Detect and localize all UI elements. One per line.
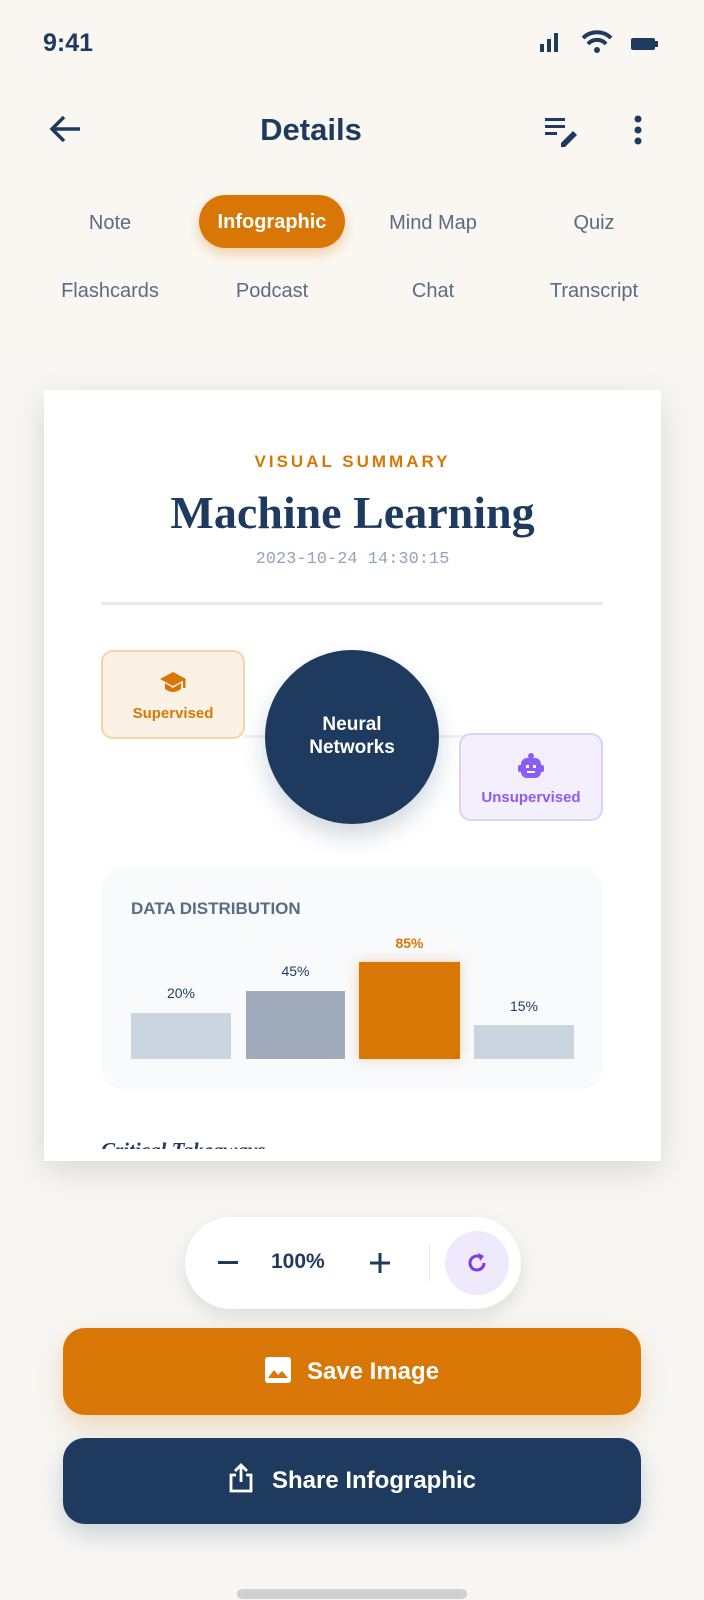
tabs: Flashcards bbox=[61, 280, 159, 302]
connector line bbox=[244, 735, 504, 738]
icon: more bbox=[634, 116, 642, 144]
tabs: Quiz bbox=[573, 212, 615, 234]
tabs: Chat bbox=[412, 280, 454, 302]
icon: graduation cap bbox=[160, 672, 186, 692]
node: supervised bbox=[101, 650, 245, 739]
active tab pill bbox=[199, 195, 345, 248]
date: 2023-10-24 14:30:15 bbox=[256, 550, 449, 569]
bar chart bbox=[131, 935, 574, 1066]
icon: robot bbox=[518, 753, 544, 778]
save button: Save Image bbox=[307, 1358, 439, 1385]
back arrow bbox=[50, 116, 80, 142]
node: supervised: Supervised bbox=[133, 705, 213, 722]
page title: Details bbox=[260, 112, 362, 147]
tabs: Transcript bbox=[550, 280, 638, 302]
bar chart: 15% bbox=[510, 998, 538, 1014]
chart panel bbox=[101, 867, 603, 1089]
share button: Share Infographic bbox=[272, 1467, 476, 1494]
infographic card bbox=[44, 390, 661, 1161]
bar chart: 20% bbox=[167, 985, 195, 1001]
home indicator bbox=[237, 1589, 467, 1599]
save button bbox=[63, 1328, 641, 1415]
tabs bbox=[61, 194, 638, 302]
kicker: VISUAL SUMMARY bbox=[255, 452, 450, 471]
share button bbox=[63, 1438, 641, 1524]
zoom control: 100% bbox=[271, 1250, 325, 1273]
central node bbox=[265, 650, 439, 824]
zoom control bbox=[185, 1217, 521, 1309]
node: unsupervised: Unsupervised bbox=[481, 789, 581, 806]
tabs: Mind Map bbox=[389, 212, 477, 234]
tabs: Podcast bbox=[236, 280, 308, 302]
icon: reset bbox=[445, 1231, 509, 1295]
central node: Neural bbox=[322, 714, 382, 735]
node: unsupervised bbox=[459, 733, 603, 821]
status icons bbox=[540, 30, 658, 53]
chart title: DATA DISTRIBUTION bbox=[131, 899, 301, 918]
active tab pill: Infographic bbox=[218, 211, 326, 233]
icon: share bbox=[230, 1463, 252, 1492]
bar chart: 45% bbox=[281, 963, 310, 979]
icon: edit list bbox=[545, 118, 577, 147]
bar chart: 85% bbox=[395, 935, 424, 951]
card title: Machine Learning bbox=[170, 487, 535, 538]
status time: 9:41 bbox=[43, 29, 93, 57]
header area bbox=[0, 0, 704, 345]
tabs: Note bbox=[89, 212, 131, 234]
central node: Networks bbox=[309, 737, 395, 758]
icon: image bbox=[265, 1357, 291, 1383]
